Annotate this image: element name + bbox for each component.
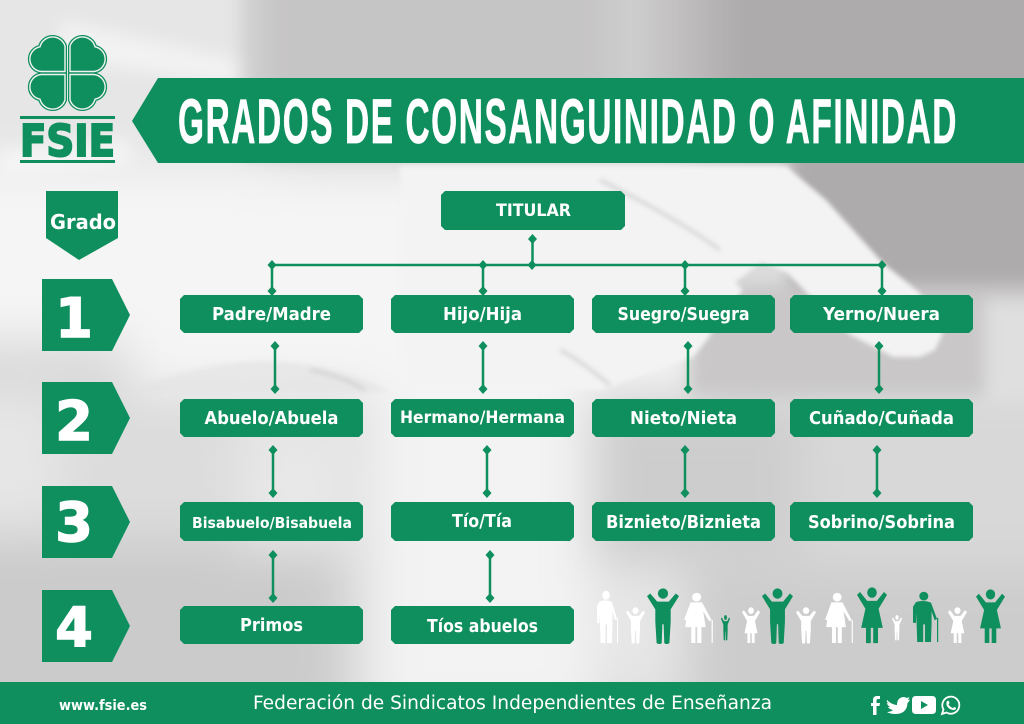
grade 1 marker: 1 bbox=[55, 287, 93, 350]
grado header: Grado bbox=[50, 210, 116, 234]
title banner bbox=[132, 78, 1024, 163]
box: Hermano/Hermana bbox=[391, 399, 574, 437]
box: Bisabuelo/Bisabuela bbox=[180, 502, 363, 541]
box: Yerno/Nuera bbox=[790, 295, 973, 333]
box: Bisabuelo/Bisabuela: Bisabuelo/Bisabuela bbox=[192, 514, 352, 532]
icon: family silhouettes bbox=[597, 587, 1005, 644]
box: Nieto/Nieta bbox=[592, 399, 775, 437]
grade 4 marker: 4 bbox=[55, 596, 93, 659]
icons: social media bbox=[871, 696, 959, 715]
box: Suegro/Suegra bbox=[592, 295, 775, 333]
footer website: www.fsie.es bbox=[59, 698, 147, 714]
footer organisation name: Federación de Sindicatos Independientes de Enseñanza bbox=[253, 693, 772, 714]
box: Sobrino/Sobrina: Sobrino/Sobrina bbox=[808, 513, 955, 533]
box: Titular bbox=[441, 191, 625, 230]
footer bar bbox=[0, 682, 1024, 724]
grade 2 marker bbox=[42, 382, 130, 454]
box: Biznieto/Biznieta bbox=[592, 502, 775, 541]
box: Cuñado/Cuñada bbox=[790, 399, 973, 437]
box: Tío/Tía bbox=[391, 502, 574, 541]
icon: facebook bbox=[871, 696, 880, 715]
box: Tíos abuelos bbox=[391, 606, 574, 644]
grade 1 marker bbox=[42, 279, 130, 351]
box: Hijo/Hija bbox=[391, 295, 574, 333]
box: Primos: Primos bbox=[240, 616, 303, 636]
box: Titular: TITULAR bbox=[496, 201, 571, 221]
box: Tío/Tía: Tío/Tía bbox=[452, 512, 512, 532]
grade 3 marker bbox=[42, 486, 130, 558]
grade 3 marker: 3 bbox=[55, 491, 93, 554]
box: Hermano/Hermana: Hermano/Hermana bbox=[400, 408, 565, 427]
grade 4 marker bbox=[42, 590, 130, 662]
icon: twitter bbox=[887, 697, 910, 714]
box: Suegro/Suegra: Suegro/Suegra bbox=[618, 305, 750, 325]
connector lines bbox=[268, 234, 886, 603]
logo wordmark: FSIE bbox=[20, 116, 115, 167]
box: Abuelo/Abuela bbox=[180, 399, 363, 437]
box: Abuelo/Abuela: Abuelo/Abuela bbox=[204, 409, 338, 429]
grade 2 marker: 2 bbox=[55, 390, 93, 453]
icon: youtube bbox=[912, 696, 936, 714]
box: Biznieto/Biznieta: Biznieto/Biznieta bbox=[606, 513, 761, 533]
box: Padre/Madre bbox=[180, 295, 363, 333]
box: Padre/Madre: Padre/Madre bbox=[212, 305, 331, 325]
box: Nieto/Nieta: Nieto/Nieta bbox=[630, 409, 737, 429]
box: Yerno/Nuera: Yerno/Nuera bbox=[822, 305, 940, 325]
logo bars bbox=[20, 116, 115, 163]
FSIE logo bbox=[20, 37, 115, 167]
icon: whatsapp bbox=[942, 697, 959, 714]
box: Tíos abuelos: Tíos abuelos bbox=[427, 617, 538, 637]
box: Sobrino/Sobrina bbox=[790, 502, 973, 541]
grado header bbox=[46, 191, 118, 260]
icon: clover bbox=[30, 37, 105, 109]
box: Cuñado/Cuñada: Cuñado/Cuñada bbox=[809, 409, 954, 429]
box: Hijo/Hija: Hijo/Hija bbox=[443, 305, 522, 325]
box: Primos bbox=[180, 606, 363, 644]
